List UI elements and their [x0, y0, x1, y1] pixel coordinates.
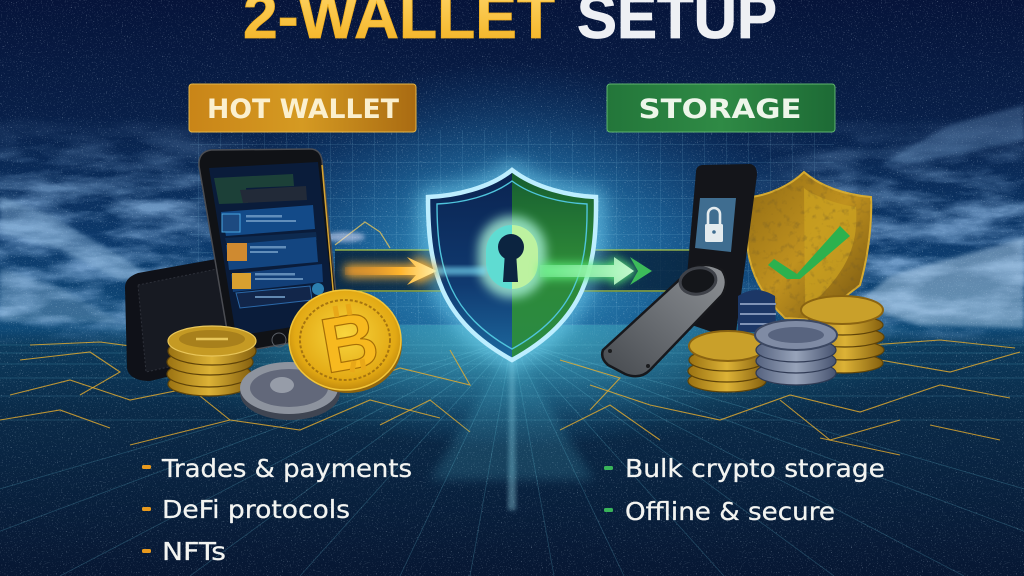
arrow: shield to storage (green) [540, 256, 652, 286]
icon: smartphone with app list [199, 149, 339, 352]
transfer band behind arrows [325, 222, 690, 292]
arrow: hot wallet to shield (orange) [345, 256, 486, 285]
illustration: cold storage devices and coins [602, 164, 884, 392]
icon: silver coin stack [755, 320, 837, 385]
icon: blue coin stack behind [738, 290, 776, 332]
phone app rows [214, 174, 324, 347]
bullet: DeFi: DeFi protocols [162, 495, 350, 524]
heading: storage label [607, 84, 835, 132]
heading: hot wallet label [189, 84, 416, 132]
icon: gold coin stack, middle [688, 331, 767, 392]
circuit floor with perspective lines [0, 325, 1024, 576]
heading: hot wallet label: HOT WALLET [207, 94, 400, 125]
icon: gold coin stack [167, 326, 256, 396]
icon: bitcoin coin [289, 290, 402, 393]
icon: black leather wallet [125, 258, 238, 381]
icon: bitcoin coin: B [314, 294, 385, 390]
panel: central shield with keyhole [428, 170, 596, 360]
bullet: NFTs [142, 537, 226, 566]
bullet: bulk storage: Bulk crypto storage [625, 454, 885, 483]
shield left half [428, 170, 512, 360]
bullet: NFTs: NFTs [162, 537, 226, 566]
heading: storage label: STORAGE [638, 94, 802, 125]
icon: gold coin stack, right [801, 296, 884, 373]
text block: hot wallet uses [142, 454, 412, 566]
icon: silver coin [240, 362, 340, 420]
text block: storage uses [604, 454, 885, 526]
icon: gold shield with green check [747, 172, 871, 320]
shield right half [512, 170, 596, 360]
bullet: offline: Offline & secure [625, 497, 835, 526]
icon: black hardware wallet with padlock [683, 164, 757, 340]
icon: silver swivel key device [602, 265, 726, 376]
background: icy mountains on both sides [0, 104, 1024, 342]
padlock [705, 208, 723, 242]
keyhole [478, 216, 546, 298]
title [243, 0, 777, 52]
illustration: hot wallet, phone and coins [125, 149, 402, 420]
bullet: trades: Trades & payments [161, 454, 412, 483]
